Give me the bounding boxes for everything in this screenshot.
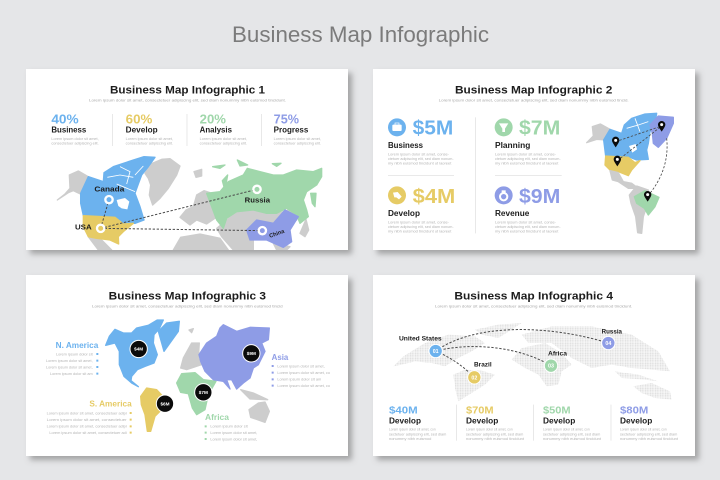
stat: $7M planning: $7M bbox=[519, 117, 560, 140]
legend: Asia bbox=[272, 353, 331, 388]
stat: $5M business: ctetuer adipiscing elit, sed diam nonum- bbox=[388, 156, 454, 161]
value badge: $9M: $9M bbox=[247, 351, 256, 356]
marker: Canada: Canada bbox=[94, 187, 124, 194]
stat: 20% analysis: consectetuer adipiscing elit. bbox=[200, 141, 247, 146]
stat: $5M business: my nibh euismod tincidunt ut laoreet bbox=[388, 161, 452, 166]
panel 4 title: Business Map Infographic 4 bbox=[454, 291, 614, 303]
legend: N. America: Lorem ipsum dolor sit am bbox=[50, 371, 93, 376]
stat: 60% develop: 60% bbox=[126, 111, 152, 126]
legend: N. America bbox=[46, 341, 99, 376]
stat: 75% progress bbox=[274, 111, 321, 146]
stat: 40% business: consectetuer adipiscing elit. bbox=[51, 141, 99, 146]
value badge: $9M bbox=[243, 345, 260, 362]
marker 03 Africa bbox=[544, 352, 568, 372]
marker 01 United States bbox=[399, 336, 442, 358]
value badge: $4M: $4M bbox=[134, 347, 143, 352]
legend: S. America: S. America bbox=[89, 400, 132, 409]
marker 02 Brazil bbox=[468, 363, 492, 384]
stat: $80M: nonummy nibh euismod tincidunt bbox=[620, 436, 679, 441]
legend: N. America: N. America bbox=[56, 341, 99, 350]
world map with highlighted countries bbox=[57, 157, 322, 250]
legend: Africa: Lorem ipsum dolor sit bbox=[210, 424, 249, 429]
stat: 60% develop: Develop bbox=[126, 126, 158, 135]
stat: $70M bbox=[466, 405, 525, 441]
marker 04 Russia bbox=[602, 329, 623, 350]
stat: $80M: Develop bbox=[620, 416, 652, 425]
stat: $9M revenue: Revenue bbox=[495, 209, 530, 218]
legend: N. America: Lorem ipsum dolor sit amet, bbox=[46, 358, 93, 363]
stat: $40M: sectetuer adipiscing elit, sed diam bbox=[389, 431, 447, 436]
stat: $5M business: $5M bbox=[413, 117, 453, 140]
stat: 60% develop: Lorem ipsum dolor sit amet, bbox=[126, 136, 173, 141]
legend: Asia: Lorem ipsum dolor sit am bbox=[277, 377, 322, 382]
value badge: $7M bbox=[195, 384, 212, 401]
stat: $50M: Develop bbox=[543, 416, 575, 425]
stat: $4M develop: ctetuer adipiscing elit, sed diam nonum- bbox=[388, 224, 454, 229]
legend: N. America: Lorem ipsum dolor sit amet, bbox=[46, 364, 93, 369]
stat: $50M bbox=[543, 405, 602, 441]
legend: N. America: Lorem ipsum dolor sit bbox=[56, 351, 94, 356]
legend: Asia: Lorem ipsum dolor sit amet, bbox=[277, 363, 325, 368]
stat: 40% business: 40% bbox=[51, 111, 79, 126]
stat: $40M bbox=[389, 405, 447, 441]
marker 01 United States: 01 bbox=[433, 349, 439, 355]
stat: $40M: Lorem ipsum dolor sit amet, con bbox=[389, 427, 436, 432]
stat: $7M planning: my nibh euismod tincidunt ut laoreet bbox=[495, 161, 559, 166]
marker: USA: USA bbox=[75, 225, 92, 232]
legend: S. America: Lorem ipsum dolor sit amet, consectetuer adipi bbox=[47, 424, 127, 429]
stat: $80M: Lorem ipsum dolor sit amet, con bbox=[620, 427, 667, 432]
value badge: $7M: $7M bbox=[199, 390, 208, 395]
stat: $9M revenue: my nibh euismod tincidunt ut laoreet bbox=[495, 229, 559, 234]
stat: $9M revenue: ctetuer adipiscing elit, sed diam nonum- bbox=[495, 224, 561, 229]
route lines bbox=[101, 189, 262, 231]
legend: S. America: Lorem ipsum dolor sit amet, consectetuer adi bbox=[49, 430, 127, 435]
route lines bbox=[616, 126, 667, 196]
stat: $70M: $70M bbox=[466, 405, 494, 416]
marker 02 Brazil: Brazil bbox=[474, 363, 492, 369]
stat: $40M: $40M bbox=[389, 405, 418, 416]
stat: $5M business bbox=[388, 117, 454, 166]
marker 03 Africa: 03 bbox=[548, 364, 554, 370]
legend: Africa: Lorem ipsum dolor sit amet, bbox=[210, 430, 257, 435]
stat: $70M: sectetuer adipiscing elit, sed diam bbox=[466, 431, 524, 436]
stat: 75% progress: 75% bbox=[274, 111, 299, 126]
marker: China bbox=[259, 227, 286, 240]
stat: $50M: Lorem ipsum dolor sit amet, con bbox=[543, 427, 590, 432]
value badge: $6M bbox=[156, 395, 174, 412]
stat: $40M: Develop bbox=[389, 416, 421, 425]
marker 03 Africa: Africa bbox=[548, 352, 568, 358]
legend: S. America: Lorem ipsum dolor sit amet, consectetuer bbox=[47, 417, 127, 422]
legend: S. America: Lorem ipsum dolor sit amet, consectetuer adipi bbox=[47, 410, 127, 415]
marker: Canada bbox=[94, 187, 124, 203]
panel: infographic 4 bbox=[373, 275, 695, 456]
stat: 40% business: Business bbox=[51, 126, 87, 135]
panel 2 title: Business Map Infographic 2 bbox=[455, 84, 612, 96]
panel: infographic 1 bbox=[26, 69, 348, 250]
route lines bbox=[436, 330, 608, 377]
stat: $80M: sectetuer adipiscing elit, sed diam bbox=[620, 431, 678, 436]
panel 1 title: Business Map Infographic 1 bbox=[110, 84, 265, 96]
marker: Russia: Russia bbox=[245, 197, 270, 204]
stat: 60% develop: consectetuer adipiscing elit. bbox=[126, 141, 173, 146]
stat: 20% analysis: Lorem ipsum dolor sit amet, bbox=[200, 136, 247, 141]
stat: $9M revenue: $9M bbox=[519, 185, 560, 208]
legend: Africa: Africa bbox=[205, 413, 230, 422]
marker 04 Russia: 04 bbox=[605, 341, 611, 347]
stat: $7M planning: Lorem ipsum dolor sit amet, conse- bbox=[495, 151, 557, 156]
stat: $5M business: Lorem ipsum dolor sit amet, conse- bbox=[388, 151, 450, 156]
panel: infographic 3 bbox=[26, 275, 348, 456]
legend: S. America bbox=[47, 400, 132, 435]
stat: 20% analysis: Analysis bbox=[200, 126, 233, 135]
world map bbox=[106, 320, 269, 431]
map pins bbox=[612, 121, 665, 202]
marker: China: China bbox=[269, 228, 286, 240]
stat: $50M: $50M bbox=[543, 405, 571, 416]
stat: $40M: nonummy nibh euismod bbox=[389, 436, 431, 441]
stat: 75% progress: Lorem ipsum dolor sit amet, bbox=[274, 136, 321, 141]
stat: $4M develop bbox=[388, 185, 455, 234]
stat: 20% analysis bbox=[200, 111, 247, 146]
stat: $7M planning bbox=[495, 117, 561, 166]
legend: Asia: Lorem ipsum dolor sit amet, co bbox=[277, 383, 331, 388]
panel 4 subtitle: Lorem ipsum dolor sit amet, consectetuer adipiscing elit, sed diam nonummy nibh euismod tincidunt. bbox=[435, 304, 632, 309]
legend: Asia: Asia bbox=[272, 353, 289, 362]
stat: $4M develop: my nibh euismod tincidunt ut laoreet bbox=[388, 229, 452, 234]
stat: $4M develop: Develop bbox=[388, 209, 420, 218]
stat: 40% business bbox=[51, 111, 99, 146]
stat: $7M planning: ctetuer adipiscing elit, sed diam nonum- bbox=[495, 156, 561, 161]
panel 1 subtitle: Lorem ipsum dolor sit amet, consectetuer adipiscing elit, sed diam nonummy nibh euismod tincidunt. bbox=[89, 97, 286, 102]
stat: $80M bbox=[620, 405, 679, 441]
stat: $4M develop: Lorem ipsum dolor sit amet, conse- bbox=[388, 219, 450, 224]
stat: 40% business: Lorem ipsum dolor sit amet, bbox=[51, 136, 99, 141]
value badge: $4M bbox=[130, 340, 147, 358]
legend: Africa: Lorem ipsum dolor sit amet, bbox=[210, 436, 257, 441]
marker 01 United States: United States bbox=[399, 336, 442, 342]
stat: $9M revenue bbox=[495, 185, 561, 234]
stat: $4M develop: $4M bbox=[413, 185, 455, 208]
panel: infographic 2 bbox=[373, 69, 695, 250]
marker: Russia bbox=[245, 186, 270, 204]
stat: 75% progress: Progress bbox=[274, 126, 309, 135]
stat: $50M: sectetuer adipiscing elit, sed diam bbox=[543, 431, 601, 436]
stat: $9M revenue: Lorem ipsum dolor sit amet, conse- bbox=[495, 219, 557, 224]
panel 3 subtitle: Lorem ipsum dolor sit amet, consectetuer adipiscing elit, sed diam nonummy nibh euismod tincid bbox=[92, 304, 283, 309]
stat: $7M planning: Planning bbox=[495, 141, 530, 150]
legend: Asia: Lorem ipsum dolor sit amet, co bbox=[277, 370, 331, 375]
stat: $50M: nonummy nibh euismod tincidunt bbox=[543, 436, 602, 441]
stat: $5M business: Business bbox=[388, 141, 424, 150]
value badge: $6M: $6M bbox=[160, 401, 170, 406]
stat: $70M: Develop bbox=[466, 416, 498, 425]
stat: 75% progress: consectetuer adipiscing elit. bbox=[274, 141, 321, 146]
marker: USA bbox=[75, 225, 104, 232]
marker 04 Russia: Russia bbox=[602, 329, 623, 335]
stat: $80M: $80M bbox=[620, 405, 648, 416]
stat: 60% develop bbox=[126, 111, 173, 146]
legend: Africa bbox=[205, 413, 257, 441]
stat: $70M: Lorem ipsum dolor sit amet, con bbox=[466, 427, 513, 432]
dotted arc world map bbox=[393, 323, 672, 401]
stat: $70M: nonummy nibh euismod tincidunt bbox=[466, 436, 525, 441]
panel 3 title: Business Map Infographic 3 bbox=[109, 291, 266, 303]
stat: 20% analysis: 20% bbox=[200, 111, 226, 126]
map of the Americas bbox=[587, 113, 673, 233]
panel 2 subtitle: Lorem ipsum dolor sit amet, consectetuer adipiscing elit, sed diam nonummy nibh euismod tincid. bbox=[439, 97, 629, 102]
marker 02 Brazil: 02 bbox=[471, 375, 477, 381]
main heading: Business Map Infographic bbox=[232, 22, 489, 47]
